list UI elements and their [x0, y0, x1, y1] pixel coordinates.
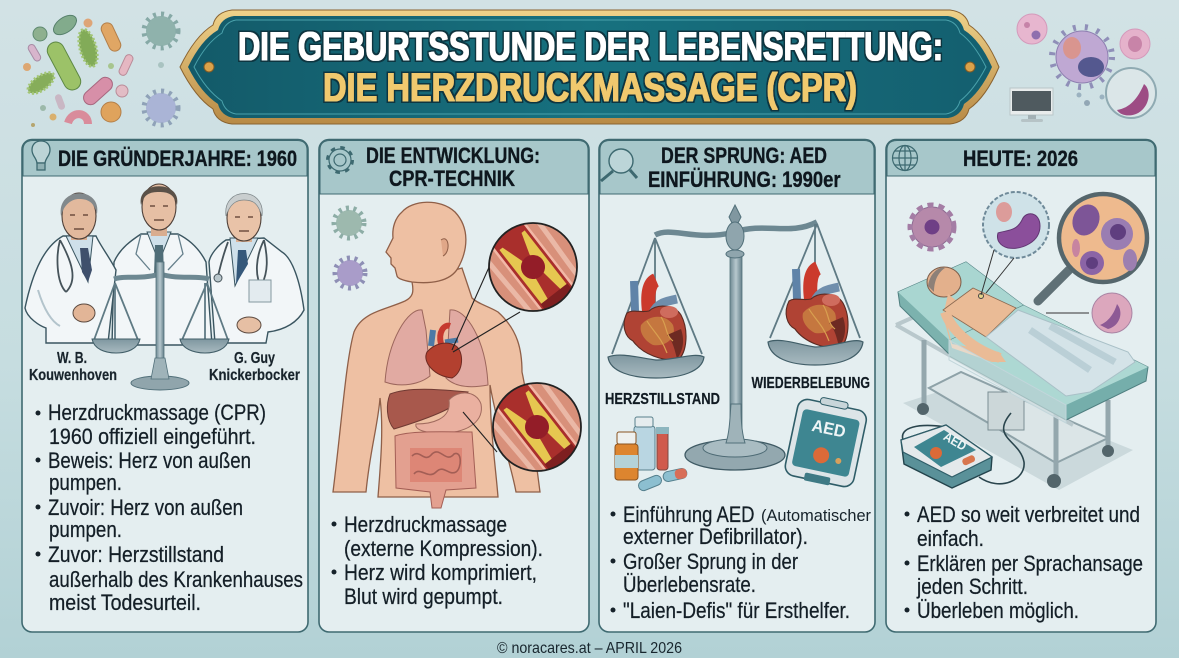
callout lines — [981, 250, 1089, 313]
illustration: small pink cell — [1092, 293, 1132, 333]
bullet list: (externe Kompression). — [344, 536, 543, 561]
illustration: human torso with organs — [333, 202, 540, 508]
illustration: middle doctor — [112, 184, 212, 345]
right heart — [786, 268, 848, 348]
bullet list: 1960 offiziell eingeführt. — [49, 424, 256, 449]
icon: globe — [892, 145, 918, 171]
panel header band — [887, 140, 1155, 176]
illustration: left doctor — [25, 193, 116, 343]
illustration: bedside AED with cable — [901, 413, 1024, 488]
organ: intestines — [395, 432, 476, 508]
patient — [927, 267, 1016, 362]
panel heading — [366, 143, 540, 191]
bullet list: AED so weit verbreitet und — [917, 502, 1140, 527]
bullet list: Großer Sprung in der — [623, 549, 798, 574]
panel header band — [23, 140, 307, 176]
bullet list: externer Defibrillator). — [623, 524, 808, 549]
bullet list: außerhalb des Krankenhauses — [49, 567, 303, 592]
illustration: blood cells and monitor, top right — [1010, 14, 1156, 122]
panel heading: CPR-TECHNIK — [389, 166, 515, 191]
illustration: magnifier over cells — [1038, 194, 1147, 301]
bullet list: Zuvor: Herzstillstand — [48, 542, 224, 567]
panel: die entwicklung cpr-technik — [319, 140, 599, 632]
bullet list: Erklären per Sprachansage — [917, 551, 1143, 576]
AED label: AED — [810, 416, 847, 442]
panel: der sprung aed — [599, 140, 875, 632]
labels: founder names — [29, 350, 300, 384]
title line 1: DIE GEBURTSSTUNDE DER LEBENSRETTUNG: — [238, 25, 943, 69]
bullet list: Blut wird gepumpt. — [344, 584, 503, 609]
icon: magnifying glass — [601, 149, 637, 181]
panel heading: DIE GRÜNDERJAHRE: 1960 — [58, 146, 297, 171]
bullet list: Herzdruckmassage — [344, 512, 507, 537]
icon: gear — [328, 148, 352, 172]
labels: founder names: G. Guy — [234, 350, 275, 367]
illustration: balance scale with hearts — [608, 205, 863, 470]
bullet list — [332, 512, 543, 609]
panel heading: EINFÜHRUNG: 1990er — [648, 167, 841, 192]
left heart — [624, 280, 686, 360]
illustration: hospital bed with patient — [896, 262, 1148, 490]
bullet list: Zuvoir: Herz von außen — [48, 495, 243, 520]
AED label: AED — [941, 429, 969, 454]
label: wiederbelebung: WIEDERBELEBUNG — [752, 375, 870, 392]
organ: heart — [426, 326, 462, 378]
icon: purple virus — [335, 258, 365, 288]
panel card — [319, 140, 589, 632]
callout: lower artery magnified — [475, 360, 599, 494]
bullet list: "Laien-Defis" für Ersthelfer. — [623, 598, 850, 623]
illustration: white blood cell — [983, 192, 1049, 258]
bullet list: pumpen. — [49, 470, 122, 495]
illustration: medicine bottles and pills — [615, 417, 688, 492]
bullet list: einfach. — [917, 526, 984, 551]
bullet list: jeden Schritt. — [916, 574, 1028, 599]
labels: founder names: Knickerbocker — [209, 367, 300, 384]
panel: die gründerjahre 1960 — [22, 140, 308, 632]
bullet list: Überleben möglich. — [917, 598, 1079, 623]
bullet list: Einführung AED — [623, 502, 754, 527]
panel header band — [320, 140, 588, 194]
illustration: purple cell — [910, 205, 954, 249]
title line 2: DIE HERZDRUCKMASSAGE (CPR) — [323, 66, 857, 110]
banner rivets — [204, 62, 975, 72]
sheet over patient — [986, 310, 1135, 396]
title banner — [180, 10, 999, 124]
bullet list: Überlebensrate. — [623, 572, 756, 597]
panel card — [886, 140, 1156, 632]
panel header band — [600, 140, 874, 194]
bullet list — [36, 400, 303, 615]
panel heading: DIE ENTWICKLUNG: — [366, 143, 540, 168]
mattress — [949, 305, 1148, 420]
illustration: balance scale — [92, 262, 229, 390]
illustration: AED device — [783, 393, 869, 490]
organ: liver — [387, 389, 468, 429]
illustration: right doctor — [209, 194, 304, 343]
panel card — [22, 140, 308, 632]
callout lines — [452, 265, 520, 452]
organ: stomach — [416, 393, 481, 433]
bullet list: pumpen. — [49, 517, 122, 542]
panel heading: DER SPRUNG: AED — [661, 143, 827, 168]
bullet list: Herz wird komprimiert, — [344, 560, 537, 585]
panel heading: HEUTE: 2026 — [963, 146, 1078, 171]
panel heading — [648, 143, 841, 192]
bullet list — [610, 502, 871, 623]
bullet list — [904, 502, 1143, 623]
icon: light bulb — [32, 141, 50, 170]
panel card — [599, 140, 875, 632]
labels: founder names: Kouwenhoven — [29, 367, 117, 384]
translucent drape — [949, 340, 1066, 423]
bullet list: (Automatischer — [761, 506, 871, 525]
bullet list: Beweis: Herz von außen — [48, 448, 251, 473]
labels: founder names: W. B. — [57, 350, 87, 367]
icon: green virus — [334, 208, 364, 238]
panel: heute 2026 — [886, 140, 1156, 632]
organ: lungs — [385, 310, 430, 385]
illustration: germs and bacteria, top left — [23, 11, 178, 127]
label: herzstillstand: HERZSTILLSTAND — [605, 391, 720, 408]
monitor — [1010, 88, 1053, 122]
bullet list: Herzdruckmassage (CPR) — [48, 400, 266, 425]
footer credit: © noracares.at – APRIL 2026 — [497, 640, 682, 657]
callout: upper artery magnified — [471, 200, 595, 334]
bullet list: meist Todesurteil. — [49, 590, 201, 615]
